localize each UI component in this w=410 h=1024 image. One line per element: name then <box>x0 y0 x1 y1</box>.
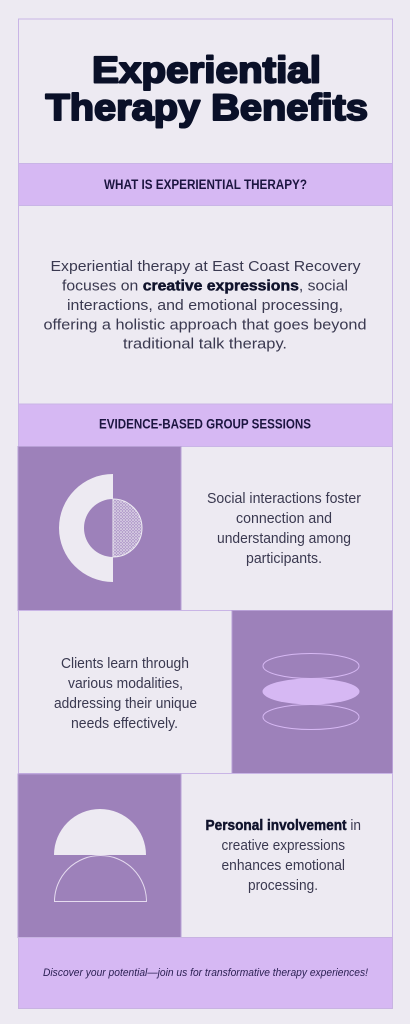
text block: modalities: various modalities, <box>68 676 183 692</box>
text block: social interactions <box>207 491 361 567</box>
text block: personal involvement: processing. <box>248 878 318 894</box>
text block: personal involvement: creative expressions <box>222 838 345 854</box>
text block: social interactions: participants. <box>246 551 322 567</box>
text block: personal involvement <box>206 818 361 894</box>
title <box>46 50 368 128</box>
text block: social interactions: Social interactions foster <box>207 491 361 507</box>
text block: modalities: Clients learn through <box>61 656 189 672</box>
text block: modalities: addressing their unique <box>54 696 197 712</box>
title: Therapy Benefits <box>46 87 368 128</box>
text block: social interactions: understanding among <box>217 531 351 547</box>
panel: modalities <box>18 610 392 774</box>
heading band: evidence-based group sessions <box>18 404 392 446</box>
panel: personal involvement <box>18 774 392 938</box>
text block: description: traditional talk therapy. <box>123 336 287 352</box>
icon: stacked ellipses <box>262 654 360 730</box>
text block: personal involvement: enhances emotional <box>222 858 345 874</box>
text block: description: interactions, and emotional processing, <box>67 298 343 314</box>
icon: stacked half circles <box>54 809 146 902</box>
footer band: call to action <box>18 938 392 1008</box>
text block: modalities <box>54 656 197 732</box>
panel: description <box>18 206 392 404</box>
text block: personal involvement: Personal involvement in <box>206 818 361 834</box>
panel: title <box>18 19 392 164</box>
text block: description: focuses on creative expressions , social <box>62 278 348 294</box>
text block: description: Experiential therapy at East Coast Recovery <box>50 259 361 275</box>
title: Experiential <box>92 50 321 90</box>
text block: description: offering a holistic approach that goes beyond <box>44 318 366 334</box>
text block: modalities: needs effectively. <box>71 716 178 732</box>
heading band: what is experiential therapy <box>18 164 392 206</box>
heading band: evidence-based group sessions: EVIDENCE-BASED GROUP SESSIONS <box>99 416 311 432</box>
text block: description <box>44 259 366 352</box>
text block: social interactions: connection and <box>236 511 332 527</box>
icon: half ring with dotted half circle <box>59 474 142 582</box>
panel: social interactions <box>18 446 392 610</box>
heading band: what is experiential therapy: WHAT IS EXPERIENTIAL THERAPY? <box>104 177 307 192</box>
footer band: call to action: Discover your potential—join us for transformative therapy experiences! <box>43 967 368 979</box>
